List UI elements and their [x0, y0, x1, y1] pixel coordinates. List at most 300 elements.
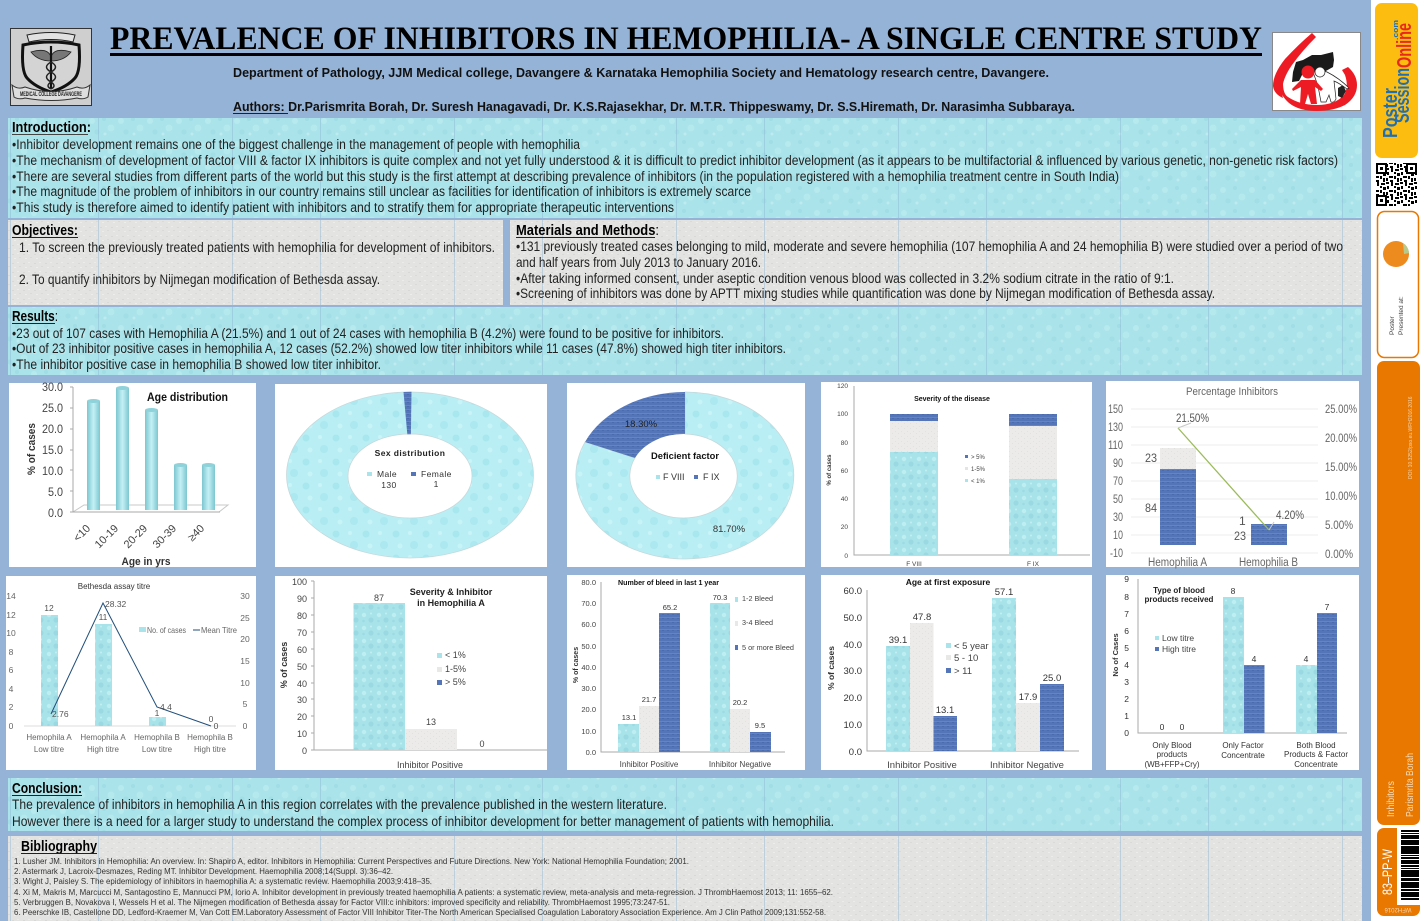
right axis: 5.00%: [1325, 518, 1353, 532]
data labels: 4.20%: [1276, 508, 1304, 522]
y title: % of cases: [573, 647, 580, 683]
y title: % of cases: [827, 454, 833, 486]
legend: < 5 year: [954, 641, 989, 652]
bars: [41, 615, 166, 726]
left axis: 50: [1113, 494, 1123, 506]
data labels: [44, 599, 219, 731]
chart: deficient factor donut: [567, 383, 805, 567]
logo: medical college crest: MEDICAL COLLEGE DAVANGERE: [20, 92, 82, 98]
authors line: Authors: Dr.Parismrita Borah, Dr. Suresh Hanagavadi, Dr. K.S.Rajasekhar, Dr. M.T.R. Thippeswamy, Dr. S.S.Hiremath, Dr. Narasimha Subbaraya.: [233, 99, 1075, 114]
data labels: 9.5: [755, 721, 765, 730]
objectives text: 2. To quantify inhibitors by Nijmegan modification of Bethesda assay.: [19, 272, 380, 287]
references: [14, 857, 833, 917]
y axis labels: 20.0: [42, 424, 63, 436]
legend: > 5%: [445, 677, 466, 687]
left axis: 2: [9, 702, 14, 712]
axis labels: 90: [297, 594, 307, 604]
axis labels: 70.0: [581, 599, 596, 608]
axis labels: 120: [837, 383, 848, 390]
right axis: 30: [240, 591, 250, 601]
right axis: 10.00%: [1325, 489, 1357, 503]
y title: % of cases: [826, 646, 836, 690]
panel: results: [8, 307, 1362, 375]
data labels: 4: [1304, 654, 1309, 664]
axis labels: [837, 383, 848, 560]
title: PREVALENCE OF INHIBITORS IN HEMOPHILIA- A SINGLE CENTRE STUDY: [110, 21, 1262, 57]
results heading: Results:: [12, 309, 58, 325]
chart: age at first exposure: [821, 575, 1092, 771]
right axis: 5: [243, 699, 248, 709]
data labels: 12: [44, 603, 54, 613]
donut title: Deficient factor: [651, 451, 719, 462]
legend: [735, 594, 794, 652]
mean titre line: [51, 603, 211, 726]
left axis: -10: [1110, 548, 1123, 560]
left axis: 6: [9, 665, 14, 675]
sidebar: presented at frame: [1378, 212, 1418, 358]
objectives text: [19, 240, 495, 287]
y axis labels: 15.0: [42, 445, 63, 457]
donut legend: F IX: [703, 472, 720, 482]
axis labels: 30: [297, 695, 307, 705]
axis labels: 50.0: [844, 613, 862, 624]
donut legend: 1: [434, 479, 439, 489]
male slice: [286, 392, 534, 558]
icon: congress logo: [1383, 241, 1409, 267]
chart title: [1145, 586, 1214, 604]
donut legend: [656, 472, 720, 482]
left axis: 14: [6, 591, 16, 601]
axis labels: 0.0: [586, 748, 596, 757]
female slice: [404, 392, 412, 434]
objectives heading: Objectives:: [12, 223, 78, 239]
data labels: 39.1: [889, 635, 907, 646]
axis labels: 80.0: [581, 578, 596, 587]
barcode: [1401, 830, 1419, 900]
axis labels: 0: [844, 553, 848, 560]
results text: •The inhibitor positive case in hemophilia B showed low titer inhibitor.: [12, 357, 381, 372]
data labels: 87: [374, 593, 384, 603]
methods text: and half years from July 2013 to January 2016.: [516, 255, 761, 270]
axis labels: 2: [1124, 694, 1129, 704]
percentage labels: 18.30%: [625, 419, 658, 430]
x labels: Low titre: [142, 745, 173, 754]
left axis: 0: [9, 721, 14, 731]
donut legend: Male: [377, 469, 397, 479]
presented at text: [1389, 296, 1405, 335]
left axis: 10: [1113, 530, 1123, 542]
left axis: 90: [1113, 458, 1123, 470]
chart title: Age distribution: [147, 390, 228, 404]
y axis labels: 10.0: [42, 466, 63, 478]
introduction text: •This study is therefore aimed to identify patient with inhibitors and to stratify them for appropriate therapeutic interventions: [12, 200, 674, 215]
data labels: 65.2: [663, 603, 677, 612]
axis labels: 3: [1124, 677, 1129, 687]
axis labels: [844, 586, 862, 758]
x axis labels: 20-29: [122, 523, 150, 551]
x labels: F VIII: [906, 561, 922, 568]
chart title: Severity of the disease: [914, 396, 990, 403]
chart: severity of the disease: [821, 382, 1092, 568]
panel: bibliography: [8, 836, 1362, 921]
x labels: Inhibitor Positive: [887, 760, 957, 771]
left axis: [1108, 404, 1123, 560]
axis labels: 40: [297, 679, 307, 689]
axis labels: [581, 578, 596, 757]
introduction text: [12, 137, 1338, 215]
data labels: 20.2: [733, 698, 747, 707]
legend: No. of cases: [147, 625, 186, 635]
left axis: 4: [9, 684, 14, 694]
sidebar: poster code and barcode: [1377, 828, 1420, 916]
data labels: 7: [1325, 602, 1330, 612]
axis labels: 20: [297, 712, 307, 722]
x labels: Low titre: [34, 745, 65, 754]
data labels: 0: [214, 721, 219, 731]
legend: 1-5%: [971, 467, 986, 473]
right axis: 25: [240, 613, 250, 623]
F IX slice: [585, 392, 685, 458]
axis labels: 1: [1124, 711, 1129, 721]
donut legend: [367, 469, 452, 490]
axis labels: 0.0: [849, 747, 862, 758]
legend: > 11: [954, 666, 972, 677]
references: 5. Verbruggen B, Novakova I, Wessels H et al. The Nijmegen modification of Bethesda assay for Factor VIII:c inhibitors: improved specificity and reliability. ThrombHaemost 1995;73:247-51.: [14, 898, 670, 907]
sidebar: orange title band: DOI: 10.3252/pso.eu.WFH2016.2016: [1408, 396, 1414, 479]
legend: 1-2 Bleed: [742, 594, 773, 603]
axis labels: 40.0: [581, 663, 596, 672]
axis labels: 0: [1124, 728, 1129, 738]
right axis: 10: [240, 678, 250, 688]
data labels: 4.4: [160, 702, 172, 712]
chart title: in Hemophilia A: [417, 598, 485, 608]
right axis: 20: [240, 634, 250, 644]
data labels: [1160, 586, 1330, 732]
data labels: 2.76: [52, 709, 69, 719]
left axis: 8: [9, 647, 14, 657]
bars: [1223, 597, 1337, 733]
x axis labels: <10: [71, 523, 93, 544]
data labels: [622, 593, 765, 730]
legend: 1-5%: [445, 664, 466, 674]
chart title: Number of bleed in last 1 year: [618, 578, 719, 587]
conclusion text: [12, 796, 834, 829]
legend: > 5%: [971, 455, 986, 461]
axis labels: 7: [1124, 609, 1129, 619]
references: 4. Xi M, Makris M, Marcucci M, Santagostino E, Mannucci PM, Iorio A. Inhibitor development in previously treated haemophilia A patients: a systematic review, meta-analysis and meta-regression. J ThrombHaemost 2013; 11: 1655–62.: [14, 888, 833, 897]
legend: 3-4 Bleed: [742, 618, 773, 627]
x labels: F IX: [1027, 561, 1040, 568]
x labels: [26, 733, 233, 754]
chart: age distribution: [9, 382, 256, 568]
chart: bethesda assay titre: [6, 576, 256, 770]
bars: [1160, 448, 1287, 545]
objectives text: 1. To screen the previously treated patients with hemophilia for development of inhibitors.: [19, 240, 495, 255]
axis labels: 40.0: [844, 640, 862, 651]
sidebar: QR code: [1376, 163, 1417, 206]
left axis: 110: [1108, 440, 1123, 452]
x labels: Inhibitor Positive: [620, 760, 679, 769]
data labels: [374, 593, 485, 749]
x axis labels: 30-39: [151, 523, 179, 551]
y axis labels: 0.0: [48, 508, 63, 520]
references: 2. Astermark J, Lacroix-Desmazes, Reding MT. Inhibitor Development. Haemophilia 2008;14(Suppl. 3):36–42.: [14, 867, 393, 876]
donut legend: F VIII: [663, 472, 685, 482]
axis labels: 10.0: [844, 720, 862, 731]
data labels: 13.1: [622, 713, 636, 722]
references: 6. Peerschke IB, Castellone DD, Ledford-Kraemer M, Van Cott EM.Laboratory Assessment of Factor VIII Inhibitor Titer-The North American Specialised Coagulation Laboratory Association Experience. Am J Clin Pathol 2009;131:552-58.: [14, 908, 826, 917]
legend: Low titre: [1162, 633, 1194, 643]
x labels: Hemophila A: [26, 733, 72, 742]
x labels: Hemophila B: [187, 733, 233, 742]
y axis labels: 5.0: [48, 487, 63, 499]
data labels: [889, 587, 1061, 716]
data labels: 0: [479, 739, 485, 749]
bars: [886, 598, 1064, 751]
data labels: 23: [1234, 529, 1246, 543]
right axis: [240, 591, 250, 731]
x labels: Concentrate: [1221, 751, 1265, 760]
right axis: 25.00%: [1325, 402, 1357, 416]
logo: hemophilia society: [1272, 32, 1360, 111]
y axis labels: 25.0: [42, 403, 63, 415]
legend: 5 - 10: [954, 653, 978, 664]
data labels: 17.9: [1019, 692, 1037, 703]
data labels: 4: [1252, 654, 1257, 664]
axis labels: 20.0: [844, 693, 862, 704]
x axis labels: 10-19: [93, 523, 121, 551]
x labels: Inhibitor Negative: [990, 760, 1064, 771]
right axis: 20.00%: [1325, 431, 1357, 445]
axis labels: 80: [297, 611, 307, 621]
x labels: [1144, 741, 1348, 769]
data labels: 1: [155, 708, 160, 718]
axis labels: 8: [1124, 592, 1129, 602]
chart: percentage inhibitors: [1106, 381, 1359, 569]
axis labels: 40: [841, 496, 848, 503]
legend: < 1%: [971, 479, 986, 485]
references: 1. Lusher JM. Inhibitors in Hemophilia: An overview. In: Shapiro A, editor. Inhibitors in Hemophilia: Current Perspectives and Future Directions. New York: National Hemophilia Foundation; 2001.: [14, 857, 689, 866]
y axis labels: 30.0: [42, 382, 63, 394]
axis labels: 60: [841, 468, 848, 475]
introduction text: •Inhibitor development remains one of the biggest challenge in the management of people with hemophilia: [12, 137, 580, 152]
logo: medical college crest: [10, 28, 92, 106]
donut legend: 130: [381, 480, 397, 490]
sidebar: poster session online badge: .com: [1393, 20, 1400, 40]
legend: < 1%: [445, 650, 466, 660]
legend: [946, 641, 989, 677]
x labels: Inhibitor Negative: [709, 760, 772, 769]
cylinder bars: [87, 386, 215, 510]
x labels: Only Factor: [1222, 741, 1264, 750]
results text: •Out of 23 inhibitor positive cases in hemophilia A, 12 cases (52.2%) showed low titer inhibitors while 11 cases (47.8%) showed high titer inhibitors.: [12, 341, 786, 356]
legend: Mean Titre: [201, 625, 237, 635]
x labels: High titre: [194, 745, 227, 754]
left axis: 30: [1113, 512, 1123, 524]
y title: % of cases: [279, 642, 289, 688]
data labels: 25.0: [1043, 673, 1061, 684]
methods text: •131 previously treated cases belonging to mild, moderate and severe hemophilia (107 hemophilia A and 24 hemophilia B) were studied over a period of two: [516, 239, 1343, 254]
sidebar: orange title band: [1377, 361, 1420, 825]
axis labels: 5: [1124, 643, 1129, 653]
chart title: Bethesda assay titre: [78, 582, 151, 591]
conclusion text: The prevalence of inhibitors in hemophilia A in this region correlates with the prevalence published in the western literature.: [12, 796, 667, 812]
sidebar: poster session online badge: Poster: [1380, 88, 1402, 138]
data labels: 13: [426, 717, 436, 727]
data labels: 84: [1145, 501, 1157, 515]
introduction heading: Introduction:: [12, 120, 91, 136]
x labels: [906, 561, 1040, 568]
data labels: 8: [1231, 586, 1236, 596]
x labels: High titre: [87, 745, 120, 754]
x labels: Hemophila B: [134, 733, 180, 742]
y axis title: % of cases: [26, 423, 38, 475]
stacked bar F IX: [1009, 414, 1057, 555]
panel: conclusion: [8, 778, 1362, 831]
y axis labels: [42, 382, 63, 520]
sidebar: poster session online badge: Session: [1392, 68, 1414, 123]
panel: introduction: [8, 118, 1362, 218]
data labels: 21.7: [642, 695, 656, 704]
sidebar: poster session online badge: [1375, 3, 1418, 158]
x labels: Only Blood: [1152, 741, 1192, 750]
left axis: 130: [1108, 422, 1123, 434]
axis labels: [1124, 574, 1129, 738]
x labels: Hemophilia B: [1239, 557, 1298, 569]
axis labels: 30.0: [581, 684, 596, 693]
legend: [139, 625, 237, 635]
chart title: Age at first exposure: [906, 577, 991, 587]
donut title: Sex distribution: [375, 448, 445, 458]
results text: [12, 326, 786, 372]
data labels: 21.50%: [1176, 411, 1209, 425]
axis labels: 10: [297, 729, 307, 739]
chart: sex distribution donut: [275, 384, 547, 567]
axis labels: 100: [292, 577, 307, 587]
conclusion text: However there is a need for a larger study to understand the complex process of inhibitor development for better management of patients with hemophilia.: [12, 813, 834, 829]
x labels: Products & Factor: [1284, 750, 1348, 759]
left axis: 10: [6, 628, 16, 638]
right axis: 0: [243, 721, 248, 731]
chart title: products received: [1145, 595, 1214, 604]
left axis: 150: [1108, 404, 1123, 416]
axis labels: [292, 577, 307, 756]
donut legend: Female: [421, 469, 452, 479]
sidebar: orange title band: Parismrita Borah: [1404, 753, 1416, 817]
axis labels: 0: [302, 746, 307, 756]
x axis labels: [71, 523, 207, 551]
bars: [618, 603, 771, 752]
trend line: [1178, 428, 1269, 530]
data labels: 11: [99, 612, 108, 622]
x labels: products: [1157, 750, 1187, 759]
conclusion heading: Conclusion:: [12, 781, 82, 797]
results text: •23 out of 107 cases with Hemophilia A (21.5%) and 1 out of 24 cases with hemophilia B (4.2%) were found to be positive for inhibitors.: [12, 326, 724, 341]
data labels: 47.8: [913, 612, 931, 623]
x label: Inhibitor Positive: [397, 760, 463, 770]
introduction text: •The magnitude of the problem of inhibitors in our country remains still unclear as facilities for identification of inhibitors is extremely scarce: [12, 184, 751, 199]
chart title: Percentage Inhibitors: [1186, 386, 1278, 398]
bibliography heading: Bibliography: [21, 839, 97, 855]
panel: materials and methods: [510, 220, 1362, 305]
legend: [1155, 633, 1196, 654]
axis labels: 6: [1124, 626, 1129, 636]
axis labels: 60: [297, 645, 307, 655]
legend: High titre: [1162, 644, 1196, 654]
data labels: 1: [1239, 514, 1246, 528]
bars: [354, 603, 457, 750]
presented at text: Presented at:: [1398, 296, 1405, 335]
chart: type of blood products: [1106, 574, 1359, 770]
chart: number of bleed: [567, 575, 805, 770]
congress code: WFH2016: [1384, 906, 1412, 912]
right axis: [1325, 402, 1357, 561]
axis labels: 10.0: [581, 727, 596, 736]
F VIII slice: [576, 392, 794, 559]
left axis: [6, 591, 16, 731]
data labels: 23: [1145, 451, 1157, 465]
axis labels: 70: [297, 628, 307, 638]
data labels: 28.32: [105, 599, 127, 609]
legend: [965, 455, 986, 485]
chart title: Type of blood: [1153, 586, 1205, 595]
right axis: 0.00%: [1325, 547, 1353, 561]
poster code: 83–PP-W: [1379, 848, 1395, 895]
data labels: 13.1: [936, 705, 954, 716]
chart: deficient factor donut: 81.70%: [713, 524, 746, 535]
chart title: [410, 587, 493, 608]
sidebar: orange title band: Inhibitors: [1385, 781, 1397, 817]
stacked bar F VIII: [890, 414, 938, 555]
right axis: 15: [240, 656, 250, 666]
x axis title: Age in yrs: [122, 556, 170, 568]
x labels: Hemophilia A: [1148, 557, 1207, 569]
x labels: [887, 760, 1064, 771]
x labels: Hemophila A: [80, 733, 126, 742]
methods heading: Materials and Methods:: [516, 223, 659, 239]
introduction text: •There are several studies from different parts of the world but this study is the first attempt at describing prevalence of inhibitors (in the population registered with a hemophilia treatment centre in South India): [12, 169, 1119, 184]
panel: objectives: [8, 220, 503, 305]
x axis labels: ≥40: [186, 523, 207, 544]
y title: No of Cases: [1111, 633, 1120, 677]
axis labels: 4: [1124, 660, 1129, 670]
data labels: 57.1: [995, 587, 1013, 598]
chart: severity and inhibitor in hemophilia A: [275, 576, 547, 770]
department line: Department of Pathology, JJM Medical college, Davangere & Karnataka Hemophilia Society and Hematology research centre, Davangere.: [233, 65, 1049, 80]
axis labels: 60.0: [581, 620, 596, 629]
legend: [437, 650, 466, 687]
data labels: 0: [1180, 722, 1185, 732]
left axis: 12: [6, 610, 16, 620]
presented at text: Poster: [1389, 315, 1396, 335]
x labels: (WB+FFP+Cry): [1144, 760, 1200, 769]
axis labels: 50.0: [581, 642, 596, 651]
data labels: 0: [1160, 722, 1165, 732]
x labels: Both Blood: [1296, 741, 1336, 750]
data labels: [1145, 411, 1304, 543]
legend: 5 or more Bleed: [742, 643, 794, 652]
right axis: 15.00%: [1325, 460, 1357, 474]
methods text: •Screening of inhibitors was done by APTT mixing studies while quantification was done by Nijmegan modification of Bethesda assay.: [516, 286, 1215, 301]
methods text: •After taking informed consent, under aseptic condition venous blood was collected in 3.2% sodium citrate in the ratio of 9:1.: [516, 271, 1174, 286]
data labels: 70.3: [713, 593, 727, 602]
axis labels: 20: [841, 524, 848, 531]
axis labels: 60.0: [844, 586, 862, 597]
axis labels: 100: [837, 411, 848, 418]
axis labels: 50: [297, 662, 307, 672]
chart title: Severity & Inhibitor: [410, 587, 493, 597]
axis labels: 80: [841, 440, 848, 447]
